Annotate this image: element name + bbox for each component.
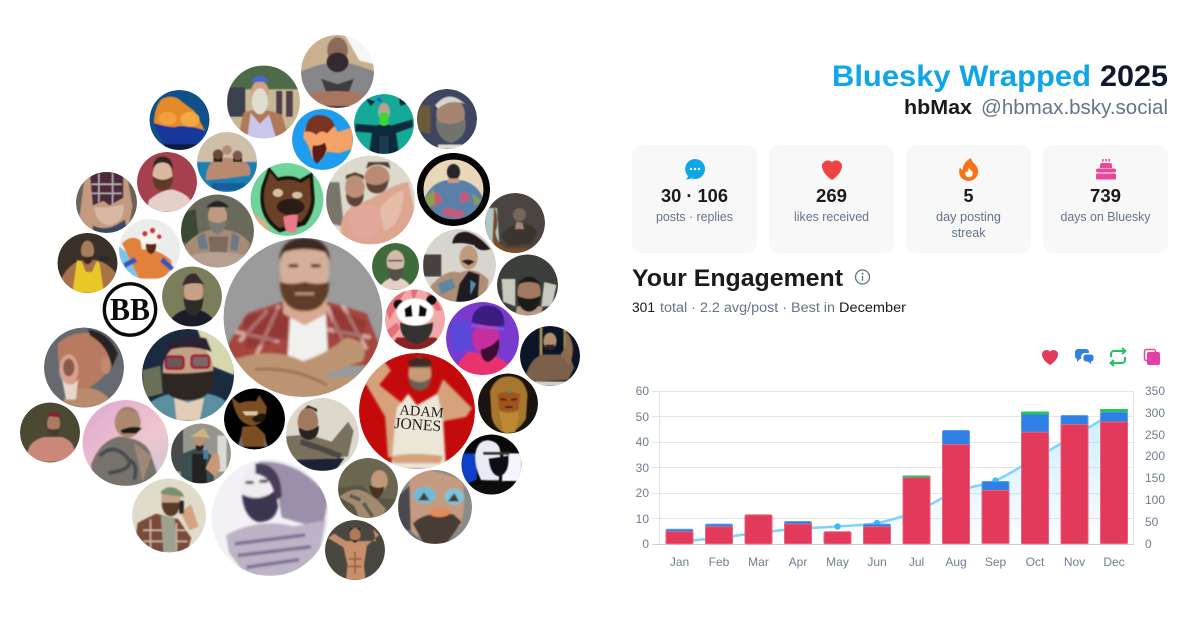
month labels: Feb: [709, 555, 730, 569]
avatar: cartoon bear on black: [224, 388, 285, 450]
month labels: [670, 555, 1125, 569]
avatar: grey beard white cap: [417, 89, 477, 149]
avatar: red background Adam Jones tank: ADAM: [399, 402, 444, 421]
panel: posts and replies: 30 · 106: [661, 186, 728, 206]
avatar: man in brown cap: [162, 266, 222, 326]
engagement summary: total · 2.2 avg/post · Best in: [660, 300, 835, 315]
month labels: Aug: [945, 555, 967, 569]
avatar: plaid shirt belly: [76, 172, 137, 233]
month labels: Oct: [1026, 555, 1045, 569]
grid lines: [652, 391, 1134, 544]
avatar: purple-lit man: [446, 302, 519, 375]
panel: likes received: likes received: [794, 210, 869, 224]
month labels: Jan: [670, 555, 689, 569]
avatar: green beard leather: [354, 94, 414, 154]
icon: likes: [1042, 350, 1058, 365]
right axis labels: 100: [1145, 493, 1165, 507]
left axis labels: 0: [642, 537, 649, 551]
panel: day posting streak: day posting: [936, 210, 1001, 224]
avatar: large pencil sketch: [212, 459, 328, 576]
bars: green reposts: [902, 409, 1128, 478]
avatar: man with palm tree sunglasses: [398, 469, 472, 544]
icon: birthday cake: [1096, 159, 1116, 180]
engagement summary: [632, 300, 907, 315]
icon: replies: [1075, 349, 1094, 364]
right axis labels: 300: [1145, 406, 1165, 420]
month labels: Jul: [909, 555, 924, 569]
icon: heart: [822, 160, 842, 180]
avatar: pink background tattooed man: [82, 400, 168, 486]
avatar: straw hat mirror selfie: [171, 424, 231, 484]
left axis labels: 60: [636, 384, 649, 398]
heading: your engagement: Your Engagement: [632, 265, 843, 292]
right axis labels: [1145, 384, 1165, 551]
avatar: yellow tank selfie: [58, 233, 118, 293]
panel: day posting streak: streak: [952, 226, 986, 240]
month labels: Jun: [867, 555, 887, 569]
avatar: flexing abs: [325, 520, 385, 580]
profile name and handle: [904, 97, 1168, 119]
left axis labels: 40: [636, 435, 649, 449]
profile name and handle: @hbmax.bsky.social: [981, 97, 1168, 119]
avatar: red background Adam Jones tank: [359, 353, 475, 469]
avatar cluster: [20, 35, 580, 580]
panel: posts and replies: posts · replies: [656, 210, 733, 224]
avatar: man lying in bed: [497, 254, 558, 316]
panel: days on Bluesky: 739: [1090, 186, 1121, 206]
avatar: red cap shirtless: [20, 402, 80, 462]
avatar: cartoon panda: [385, 290, 445, 350]
avatar: black and white illustration: [462, 434, 522, 494]
panel: likes received: [769, 145, 894, 253]
left axis labels: 10: [636, 512, 649, 526]
avatar: red background man: [137, 152, 197, 212]
month labels: Dec: [1103, 555, 1125, 569]
icon: flame: [959, 158, 978, 181]
icon: reposts: [1110, 348, 1126, 366]
engagement summary: 301: [632, 300, 655, 315]
avatar: man in black cowboy hat: [423, 229, 496, 302]
stacked bars: [666, 409, 1128, 544]
avatar: BB logo: [102, 281, 158, 338]
avatar: orange body on blue: [150, 90, 210, 150]
right axis labels: 200: [1145, 449, 1165, 463]
icon: info: [856, 270, 870, 284]
title: 2025: [1100, 60, 1168, 93]
avatar: black ring tattooed back: [417, 153, 490, 226]
avatar: cartoon dog: [250, 163, 324, 236]
right axis labels: 250: [1145, 428, 1165, 442]
avatar: cartoon mushroom hat muscleman: [119, 219, 180, 280]
bars: blue replies: [666, 412, 1128, 532]
profile name and handle: hbMax: [904, 97, 972, 119]
avatar: red background Adam Jones tank: JONES: [394, 415, 442, 435]
icon: speech bubble: [685, 159, 705, 180]
avatar: man in mirror: [485, 193, 545, 253]
icon: quotes: [1144, 350, 1160, 365]
bars: red likes: [666, 422, 1128, 544]
avatar: hairy chest dark bg: [520, 326, 580, 386]
month labels: Sep: [985, 555, 1006, 569]
right axis labels: 50: [1145, 515, 1159, 529]
avatar: three men in pool: [197, 132, 257, 192]
avatar: tattooed cap grey beard: [181, 194, 254, 268]
avatar: tattooed shirtless man: [338, 458, 398, 518]
engagement summary: December: [839, 300, 907, 315]
left axis labels: 30: [636, 461, 649, 475]
left axis labels: [636, 384, 649, 551]
avatar: orange-bearded creature: [478, 374, 538, 434]
avatar: two men mirror: [326, 156, 415, 244]
right axis labels: 350: [1145, 384, 1165, 398]
panel: days on Bluesky: [1043, 145, 1168, 253]
month labels: May: [826, 555, 849, 569]
right axis labels: 150: [1145, 471, 1165, 485]
avatar: illustrated man on blue: [292, 109, 353, 170]
panel: day posting streak: [906, 145, 1031, 253]
panel: day posting streak: 5: [963, 186, 974, 206]
left axis labels: 20: [636, 486, 649, 500]
avatar: blue cap white beard: [227, 66, 300, 138]
month labels: Nov: [1064, 555, 1085, 569]
right axis labels: 0: [1145, 537, 1152, 551]
avatar: man in grey shirt: [301, 35, 374, 108]
left axis labels: 50: [636, 410, 649, 424]
panel: posts and replies: [632, 145, 757, 253]
month labels: Mar: [748, 555, 769, 569]
avatar: man with open mouth: [44, 328, 124, 408]
panel: days on Bluesky: days on Bluesky: [1060, 210, 1151, 224]
chart: monthly engagement: [636, 384, 1165, 569]
avatar: main large portrait in red plaid: [224, 238, 382, 397]
title: Bluesky Wrapped: [832, 60, 1091, 93]
avatar: green background bald man: [372, 243, 419, 290]
avatar: green cap flannel selfie: [132, 478, 206, 552]
month labels: Apr: [789, 555, 807, 569]
panel: likes received: 269: [816, 186, 847, 206]
avatar: man with red glasses in car: [142, 329, 234, 421]
chart legend icons: [1042, 348, 1160, 366]
avatar: BB logo: BB: [110, 292, 150, 327]
avatar: tattooed bicep flex: [286, 398, 359, 471]
cumulative area line: [676, 409, 1117, 545]
